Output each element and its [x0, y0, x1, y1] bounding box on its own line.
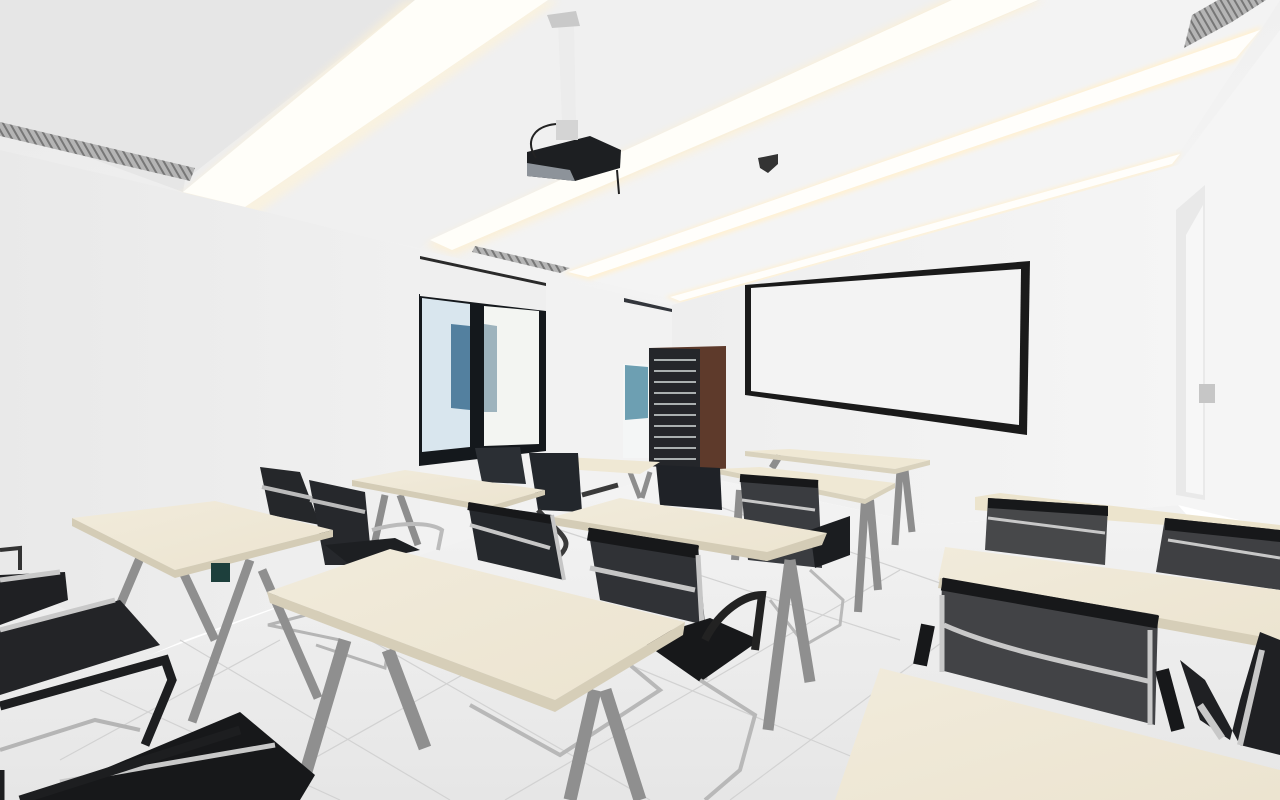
wine cabinet [649, 346, 726, 470]
chairs: centre [468, 503, 762, 800]
chairs: front left [0, 548, 315, 800]
ceiling light strips [175, 0, 1262, 303]
table: front centre [267, 549, 685, 800]
table: centre [553, 498, 827, 730]
chairs: left pair [260, 467, 442, 668]
front wall [672, 165, 1178, 525]
left wall [0, 150, 420, 655]
wall socket [211, 563, 230, 582]
chairs: right front [920, 578, 1280, 755]
far tables [372, 449, 930, 612]
floor [0, 470, 1280, 800]
table and chairs: back right [975, 493, 1280, 590]
ceiling [0, 0, 1280, 310]
table: right middle [938, 547, 1280, 650]
right wall [1176, 30, 1280, 530]
whiteboard screen [745, 261, 1030, 435]
chairs at far tables [475, 447, 850, 645]
back wall [420, 250, 672, 560]
table: left [72, 501, 333, 722]
ceiling sensor [758, 154, 778, 173]
projector [527, 11, 621, 194]
window [419, 256, 546, 466]
air vents [0, 0, 1266, 273]
table: back left [352, 470, 545, 512]
table: front right [835, 668, 1280, 800]
small side window [623, 298, 672, 458]
